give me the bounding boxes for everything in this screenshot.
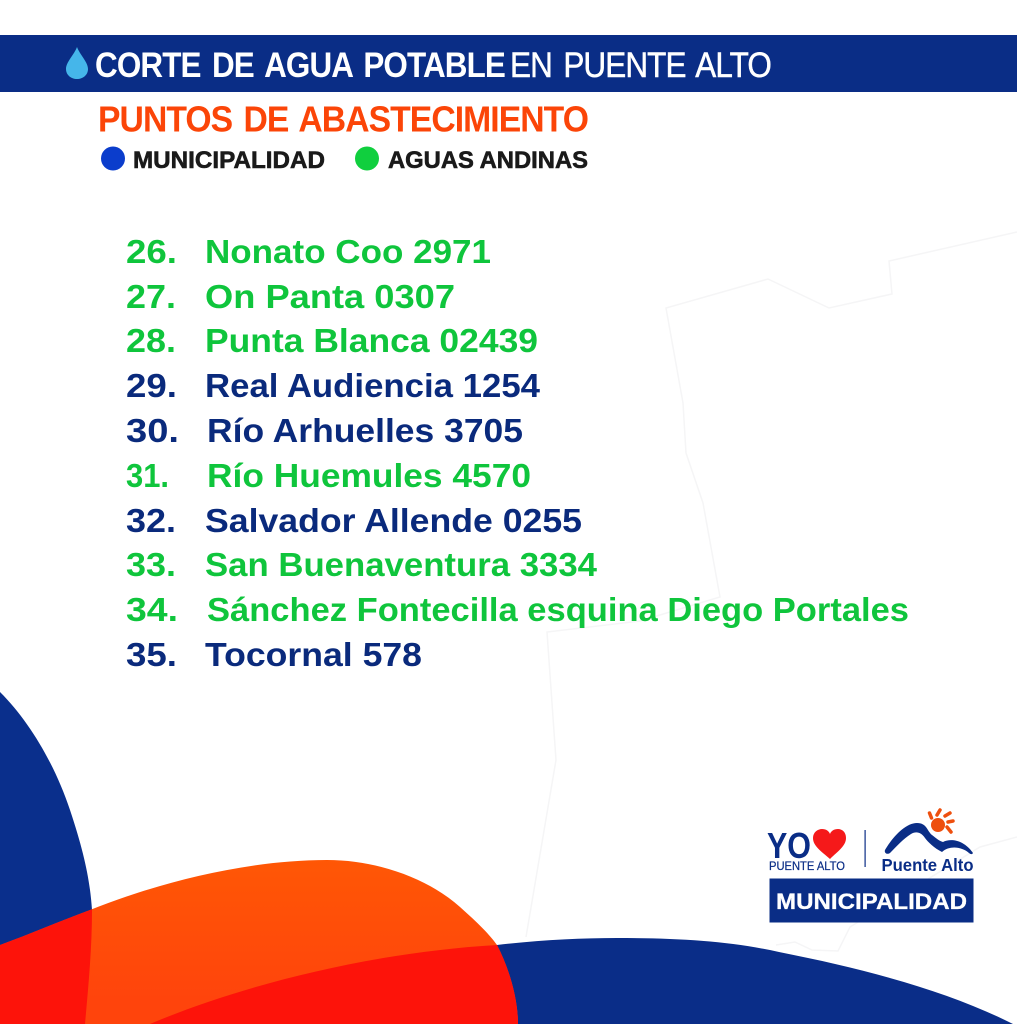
item 26: Nonato Coo 2971 [205, 234, 491, 271]
decorative bottom shapes [0, 692, 1013, 1024]
item 29: Real Audiencia 1254 [205, 368, 540, 405]
logo: municipalidad box [770, 878, 974, 922]
icon: sun [930, 810, 953, 832]
logo: yo puente alto: YO [767, 825, 811, 866]
faint map outline [526, 232, 1017, 951]
item 26: 26. [126, 234, 177, 271]
item 30: Río Arhuelles 3705 [207, 413, 523, 450]
logo: puente alto mark: Puente Alto [882, 855, 974, 875]
item 35 [126, 637, 422, 674]
header band [0, 35, 1017, 92]
icon: water drop [66, 47, 88, 79]
item 30: 30. [126, 413, 179, 450]
title: CORTE DE AGUA POTABLE [95, 45, 505, 85]
logo block [767, 810, 974, 922]
item 35: 35. [126, 637, 177, 674]
logo: yo puente alto [767, 825, 846, 873]
item 27: 27. [126, 279, 176, 316]
item 29: 29. [126, 368, 177, 405]
title: EN PUENTE ALTO [510, 45, 771, 85]
item 32: 32. [126, 503, 176, 540]
heading: puntos de abastecimiento: PUNTOS DE ABASTECIMIENTO [98, 98, 588, 140]
item 33: 33. [126, 547, 176, 584]
item 33: San Buenaventura 3334 [205, 547, 597, 584]
logo: yo puente alto: PUENTE ALTO [769, 861, 845, 873]
item 34: Sánchez Fontecilla esquina Diego Portales [207, 592, 909, 629]
item 31: 31. [126, 458, 169, 495]
legend dot: municipalidad [101, 146, 125, 170]
legend label: municipalidad: MUNICIPALIDAD [133, 147, 325, 174]
item 31: Río Huemules 4570 [207, 458, 531, 495]
logo: puente alto mark [882, 810, 974, 875]
legend label: aguas andinas: AGUAS ANDINAS [388, 147, 588, 174]
item 27: On Panta 0307 [205, 279, 455, 316]
item 28: Punta Blanca 02439 [205, 323, 538, 360]
legend dot: aguas andinas [355, 146, 379, 170]
legend [101, 146, 588, 174]
list of supply points [126, 234, 909, 674]
item 28: 28. [126, 323, 176, 360]
logo: municipalidad box: MUNICIPALIDAD [776, 889, 967, 914]
item 32: Salvador Allende 0255 [205, 503, 582, 540]
icon: heart [813, 829, 846, 859]
item 35: Tocornal 578 [205, 637, 422, 674]
item 34: 34. [126, 592, 178, 629]
